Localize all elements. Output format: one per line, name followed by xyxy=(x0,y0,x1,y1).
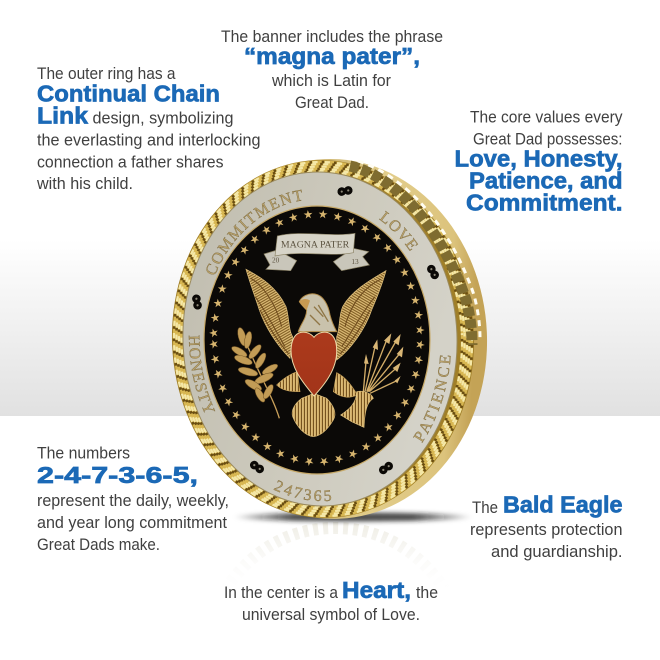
text: bald eagle note: and guardianship. xyxy=(491,543,622,561)
text: numbers note: and year long commitment xyxy=(37,514,227,532)
text: numbers note: Great Dads make. xyxy=(37,536,160,554)
text: heart note: the xyxy=(416,584,438,602)
text: chain link note: connection a father shares xyxy=(37,154,224,172)
coin reflection xyxy=(225,528,445,590)
text: heart note: In the center is a xyxy=(224,584,339,602)
text: core values: Love, Honesty, xyxy=(454,146,622,172)
word: love: LOVE xyxy=(379,210,418,251)
text: core values: Great Dad possesses: xyxy=(473,130,622,148)
text: banner phrase: Great Dad. xyxy=(295,94,369,112)
text: bald eagle note: The xyxy=(472,499,498,517)
word: patience: PATIENCE xyxy=(413,356,451,443)
infinity icon top xyxy=(339,187,351,195)
text: heart note: universal symbol of Love. xyxy=(242,606,420,624)
text: core values: Patience, and xyxy=(469,168,622,194)
black center field xyxy=(204,206,430,474)
banner: 13 xyxy=(351,257,359,266)
text: numbers note: The numbers xyxy=(37,444,130,462)
text: banner phrase xyxy=(221,28,443,112)
infinity icon right xyxy=(428,265,438,279)
infinity icon bottom left xyxy=(251,461,263,473)
text: core values xyxy=(454,108,623,216)
word: commitment: COMMITMENT xyxy=(206,190,302,274)
arrow tassel xyxy=(341,391,373,427)
banner: MAGNA PATER xyxy=(281,240,350,250)
infinity icon left xyxy=(193,296,201,308)
coin xyxy=(172,159,488,519)
left wing xyxy=(246,269,293,358)
text: numbers note: 2-4-7-3-6-5, xyxy=(37,462,198,488)
word: honesty: HONESTY xyxy=(188,335,216,412)
text: chain link note: Link xyxy=(37,102,88,128)
text: chain link note: Continual Chain xyxy=(37,80,220,106)
text: banner phrase: The banner includes the phrase xyxy=(221,28,443,46)
text: numbers note xyxy=(37,444,229,554)
infinity icon bottom right xyxy=(380,462,392,474)
tail feathers xyxy=(292,393,335,437)
text: chain link note: with his child. xyxy=(36,175,133,193)
text: chain link note: The outer ring has a xyxy=(37,65,176,83)
eagle head xyxy=(298,294,337,332)
text: core values: Commitment. xyxy=(466,190,622,216)
banner: 20 xyxy=(272,256,280,265)
text: core values: The core values every xyxy=(470,108,623,126)
cream enamel ring xyxy=(176,166,464,512)
ring lettering xyxy=(188,190,451,502)
arrows bundle xyxy=(363,333,403,393)
text: banner phrase: “magna pater”, xyxy=(244,43,420,69)
text: banner phrase: which is Latin for xyxy=(271,72,391,90)
coin ground shadow xyxy=(233,512,473,522)
text: bald eagle note xyxy=(470,492,622,561)
text: heart note: Heart, xyxy=(342,577,411,603)
rope ring: continual chain link xyxy=(165,154,481,524)
shaded upper right rope with highlights xyxy=(350,161,480,345)
eagle emblem xyxy=(230,233,403,437)
text: chain link note: the everlasting and interlocking xyxy=(37,132,260,150)
text: bald eagle note: represents protection xyxy=(470,521,622,539)
banner xyxy=(264,233,369,271)
olive branch xyxy=(230,327,279,418)
eagle legs xyxy=(277,372,357,397)
text: bald eagle note: Bald Eagle xyxy=(503,492,622,518)
text: heart note xyxy=(224,577,438,624)
heart shield xyxy=(291,332,337,396)
coin edge rim xyxy=(170,153,494,525)
right wing xyxy=(337,271,386,360)
number: 247365: 247365 xyxy=(274,480,332,502)
star ring xyxy=(209,210,424,466)
infinity link icons xyxy=(193,187,438,474)
text: numbers note: represent the daily, weekly, xyxy=(37,492,229,510)
text: chain link note: design, symbolizing xyxy=(92,110,234,128)
text: chain link note xyxy=(36,65,261,193)
